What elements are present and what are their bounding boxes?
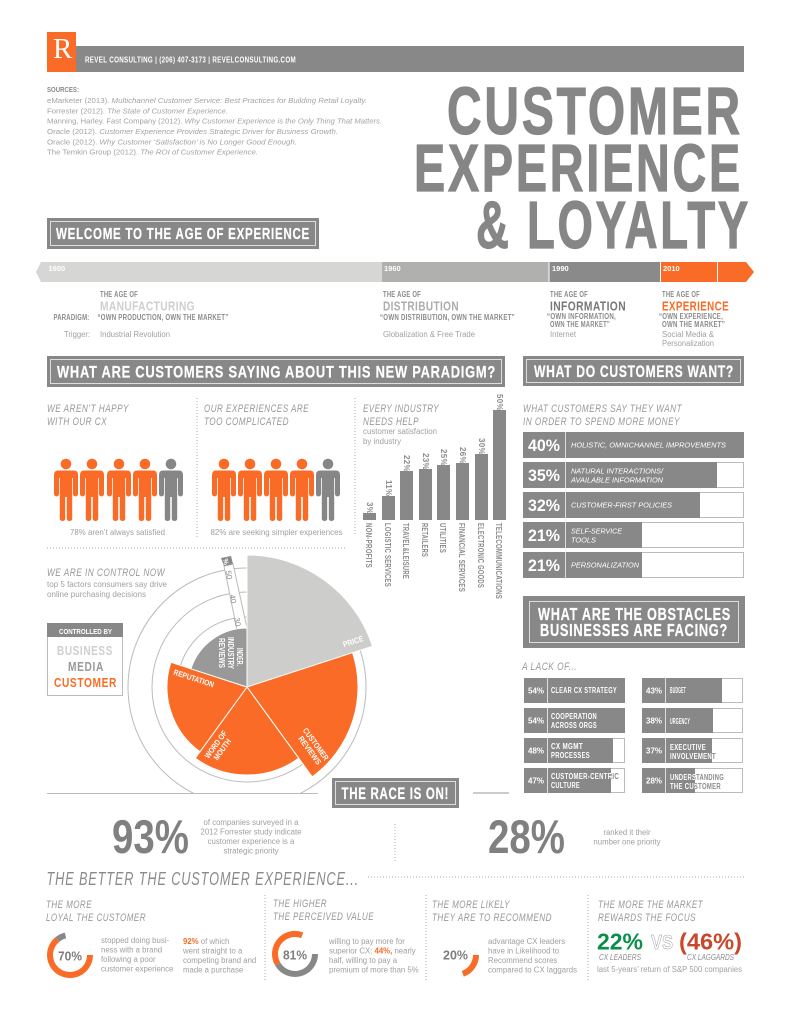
bar: clear cx strategy: CLEAR CX STRATEGY <box>551 686 617 695</box>
slice labels: MOUTH <box>212 737 233 762</box>
scale: 40 <box>228 594 238 605</box>
era: manufacturing: “OWN PRODUCTION, OWN THE MARKET” <box>98 313 228 322</box>
stat: 93%: 2012 Forrester study indicate <box>201 828 301 836</box>
panel: recommend: compared to CX laggards <box>488 966 577 974</box>
heading: welcome <box>47 218 319 249</box>
panel: loyal customer: LOYAL THE CUSTOMER <box>46 912 146 924</box>
bar: cooperation <box>524 708 625 733</box>
panel: loyal customer: made a purchase <box>183 966 243 974</box>
era: distribution: Globalization & Free Trade <box>383 330 475 339</box>
bar: 32% <box>523 492 744 518</box>
scale: 50 <box>224 570 234 581</box>
panel: not happy: WITH OUR CX <box>47 416 107 428</box>
bar: 21% self-service: SELF-SERVICE <box>571 526 623 536</box>
bar: budget <box>642 678 742 703</box>
stat: 93%: strategic priority <box>223 846 279 856</box>
panel: every industry needs help <box>363 394 506 599</box>
stat: 93%: 93% <box>112 810 189 863</box>
timeline: 2010 <box>663 264 680 273</box>
era: distribution: THE AGE OF <box>383 290 421 299</box>
panel: too complicated: 82% are seeking simpler experiences <box>210 528 343 537</box>
bar chart: industries: 50% <box>495 394 504 411</box>
bar chart: industries: UTILITIES <box>438 523 447 553</box>
bar: 40%: 40% <box>528 436 560 455</box>
scale: 30 <box>232 617 243 628</box>
bar: executive involvement: EXECUTIVE <box>670 743 706 752</box>
icon: people 78% <box>54 459 183 521</box>
bar: customer-centric: CUSTOMER-CENTRIC <box>551 772 619 781</box>
panel: what customers want: WHAT CUSTOMERS SAY THEY WANT <box>523 403 683 415</box>
header bar: REVEL CONSULTING | (206) 407-3173 | REVELCONSULTING.COM <box>85 56 296 64</box>
heading: what are customers saying: WHAT ARE CUSTOMERS SAYING ABOUT THIS NEW PARADIGM? <box>57 362 496 382</box>
panel: loyal customer: went straight to a <box>182 946 243 956</box>
bar: 40%: HOLISTIC, OMNICHANNEL IMPROVEMENTS <box>571 440 726 450</box>
donut: 20% <box>443 948 476 974</box>
panel: perceived value: superior CX; 44%, nearly <box>329 946 416 956</box>
panel: we are in control <box>47 567 167 599</box>
logo: R <box>53 33 73 65</box>
heading: what are customers saying <box>47 356 505 387</box>
era: experience: Social Media & <box>662 330 715 339</box>
donut: 81% <box>275 934 315 974</box>
era: information: INFORMATION <box>550 298 626 314</box>
bar chart: industries: 11% <box>384 480 393 496</box>
bar: 21% personalization: 21% <box>528 556 560 575</box>
legend: controlled by: CONTROLLED BY <box>59 627 112 636</box>
era: information: Internet <box>550 330 577 339</box>
era: distribution <box>380 290 515 339</box>
bar: 35% <box>523 462 744 488</box>
panel: loyal customer: stopped doing busi- <box>101 936 169 945</box>
legend: controlled by: MEDIA <box>68 659 104 674</box>
stat: 28%: number one priority <box>593 838 661 846</box>
panel: too complicated <box>204 403 343 537</box>
panel: we are in control: top 5 factors consumers say drive <box>47 580 167 589</box>
era: manufacturing: Trigger: <box>64 330 90 339</box>
era: manufacturing: PARADIGM: <box>54 313 90 322</box>
stat: 93% <box>112 810 301 863</box>
slice labels: REVIEWS <box>217 638 226 669</box>
donut: 20%: 20% <box>443 948 468 962</box>
donut: 81%: 81% <box>283 948 307 962</box>
era: experience: Personalization <box>662 339 714 348</box>
bar: 35%: NATURAL INTERACTIONS/ <box>571 466 664 476</box>
panel: perceived value: THE HIGHER <box>273 898 327 910</box>
bar: 21% self-service <box>523 522 744 548</box>
icon: people 82% <box>212 459 340 521</box>
era: manufacturing <box>54 290 228 339</box>
bar: urgency: 38% <box>646 716 662 726</box>
panel: market rewards: last 5-years’ return of S&P 500 companies <box>597 965 742 974</box>
sources: Oracle (2012). Customer Experience Provides Strategic Driver for Business Growth. <box>47 127 338 136</box>
panel: recommend <box>432 899 577 974</box>
bar: cooperation: COOPERATION <box>551 712 597 721</box>
slice labels: INDUSTRY <box>226 637 235 670</box>
timeline: 1990 <box>552 264 569 273</box>
era: manufacturing: MANUFACTURING <box>100 298 195 314</box>
bar: 21% self-service: 21% <box>528 526 560 545</box>
slice labels: PRICE <box>342 634 365 649</box>
panel: loyal customer: 92% of which <box>183 937 229 946</box>
bar: cooperation: 54% <box>528 716 544 726</box>
header bar <box>76 46 744 72</box>
bar: understanding the customer: THE CUSTOMER <box>670 782 721 791</box>
bar chart: industries: NON-PROFITS <box>364 523 373 568</box>
sources: Manning, Harley. Fast Company (2012). Why Customer Experience is the Only Thing That Matters. <box>47 117 382 126</box>
heading: the race is on: THE RACE IS ON! <box>342 784 449 803</box>
stat: 93%: customer experience is a <box>208 837 295 846</box>
bar chart: industries: 22% <box>402 455 411 472</box>
heading: welcome: WELCOME TO THE AGE OF EXPERIENCE <box>56 226 310 243</box>
era: information: “OWN INFORMATION, <box>547 312 616 321</box>
stat: 93%: of companies surveyed in a <box>204 818 299 827</box>
bar: urgency <box>642 708 742 733</box>
bar: cx mgmt: 48% <box>528 746 544 756</box>
era: experience: OWN THE MARKET” <box>662 320 725 329</box>
slice labels: WORD OF <box>203 729 229 760</box>
bar: customer-centric: CULTURE <box>551 781 580 790</box>
sources: The Temkin Group (2012). The ROI of Customer Experience. <box>47 148 258 157</box>
panel: perceived value: willing to pay more for <box>328 937 405 946</box>
panel: too complicated: TOO COMPLICATED <box>204 416 289 428</box>
legend: controlled by: BUSINESS <box>57 643 113 658</box>
rule <box>47 792 509 794</box>
panel: market rewards: VS <box>651 932 673 954</box>
panel: not happy: WE AREN’T HAPPY <box>47 403 129 415</box>
bar chart: industries: LOGISTIC SERVICES <box>383 523 392 587</box>
bar chart: industries: ELECTRONIC GOODS <box>476 523 485 588</box>
bar chart: industries: 3% <box>365 502 374 514</box>
bar: executive involvement: INVOLVEMENT <box>670 752 716 761</box>
title <box>414 74 751 263</box>
panel: loyal customer: competing brand and <box>183 956 256 965</box>
stat: 28% <box>488 810 661 863</box>
bar chart: industries: TRAVEL&LEISURE <box>401 523 410 579</box>
scale <box>221 556 247 630</box>
bar chart: industries <box>363 394 506 599</box>
sources: eMarketer (2013). Multichannel Customer Service: Best Practices for Building Retail Loyalty. <box>47 96 367 105</box>
panel: market rewards: 22% <box>597 928 643 954</box>
panel: we are in control: online purchasing decisions <box>47 590 146 599</box>
panel: market rewards: (46%) <box>679 928 742 954</box>
bar: understanding the customer: UNDERSTANDING <box>670 773 724 782</box>
bar: 40% <box>523 432 744 458</box>
stat: 28%: 28% <box>488 810 565 863</box>
era: information <box>547 290 626 339</box>
bar: customer-centric <box>524 768 624 793</box>
panel: recommend: THEY ARE TO RECOMMEND <box>432 912 552 924</box>
era: distribution: “OWN DISTRIBUTION, OWN THE MARKET” <box>380 313 515 322</box>
panel: recommend: advantage CX leaders <box>488 937 565 946</box>
slice labels: REVIEWS <box>296 735 323 767</box>
heading: obstacles: BUSINESSES ARE FACING? <box>540 620 728 640</box>
bar: 35%: AVAILABLE INFORMATION <box>570 476 664 484</box>
panel: market rewards: CX LAGGARDS <box>687 953 735 962</box>
timeline: 1960 <box>384 264 401 273</box>
sources <box>47 85 382 157</box>
bar chart: industries: RETAILERS <box>420 523 429 557</box>
panel: what customers want <box>523 403 744 578</box>
heading: the better the customer experience: THE BETTER THE CUSTOMER EXPERIENCE... <box>46 869 359 889</box>
panel: we are in control: WE ARE IN CONTROL NOW <box>47 567 166 579</box>
bar: 21% personalization: PERSONALIZATION <box>571 560 640 570</box>
legend: controlled by: CUSTOMER <box>54 675 117 690</box>
bar chart: industries: 26% <box>458 447 467 464</box>
panel: every industry needs help: NEEDS HELP <box>363 416 419 428</box>
panel: perceived value <box>273 898 419 974</box>
bar: cooperation: ACROSS ORGS <box>551 721 597 730</box>
bar: 21% self-service: TOOLS <box>571 536 596 544</box>
panel: perceived value: THE PERCEIVED VALUE <box>273 911 374 923</box>
chart: polar area factors <box>128 555 372 806</box>
logo <box>47 32 76 72</box>
slice labels: REPUTATION <box>172 668 215 689</box>
bar: cx mgmt: PROCESSES <box>551 751 590 760</box>
panel: perceived value: premium of more than 5% <box>329 966 419 974</box>
panel: every industry needs help: EVERY INDUSTRY <box>363 403 439 415</box>
bar chart: industries: 23% <box>421 453 430 470</box>
era: experience: THE AGE OF <box>662 290 700 299</box>
panel: recommend: Recommend scores <box>488 956 557 965</box>
scale: % <box>221 558 229 566</box>
panel: market rewards: CX LEADERS <box>599 953 642 962</box>
sources: Oracle (2012). Why Customer ‘Satisfaction’ is No Longer Good Enough. <box>47 137 297 146</box>
panel: recommend: have in Likelihood to <box>488 946 560 956</box>
bar chart: industries: TELECOMMUNICATIONS <box>494 523 503 599</box>
bar chart: industries: FINANCIAL SERVICES <box>457 523 466 592</box>
era: distribution: DISTRIBUTION <box>383 298 459 314</box>
panel: obstacles <box>521 661 742 793</box>
era: information: THE AGE OF <box>550 290 588 299</box>
donut: 70%: 70% <box>58 948 82 964</box>
bar: urgency: URGENCY <box>670 717 690 726</box>
legend: controlled by <box>47 623 123 696</box>
timeline <box>36 262 754 282</box>
bar: executive involvement <box>642 738 742 763</box>
slice labels <box>172 634 365 767</box>
bar chart: industries: 30% <box>477 438 486 455</box>
panel: loyal customer: ness with a brand <box>101 946 162 954</box>
era: experience <box>659 290 729 348</box>
sources: SOURCES: <box>47 85 79 94</box>
slice labels: CUSTOMER <box>301 726 331 762</box>
stat: 28%: ranked it their <box>603 828 651 837</box>
panel: loyal customer <box>46 899 256 975</box>
bar chart: industries: 25% <box>439 449 448 466</box>
donut: 70% <box>50 936 90 975</box>
panel: recommend: THE MORE LIKELY <box>432 899 510 911</box>
bar: 32%: CUSTOMER-FIRST POLICIES <box>571 500 672 510</box>
sources: Forrester (2012). The State of Customer Experience. <box>47 106 228 115</box>
panel: market rewards: REWARDS THE FOCUS <box>598 912 696 924</box>
bar: understanding the customer <box>642 768 742 793</box>
era: manufacturing: THE AGE OF <box>100 290 138 299</box>
bar: clear cx strategy: 54% <box>528 686 544 696</box>
bar: 35%: 35% <box>528 466 560 485</box>
bar: clear cx strategy <box>524 678 625 703</box>
panel: not happy: 78% aren’t always satisfied <box>70 528 165 537</box>
bar: budget: 43% <box>646 686 662 696</box>
panel: market rewards <box>597 899 742 974</box>
bar: customer-centric: 47% <box>528 776 544 786</box>
bar: executive involvement: 37% <box>646 746 662 756</box>
era: experience: EXPERIENCE <box>662 298 729 314</box>
panel: loyal customer: following a poor <box>101 955 156 964</box>
era: experience: “OWN EXPERIENCE, <box>659 312 723 321</box>
bar: cx mgmt <box>524 738 624 763</box>
timeline: 1900 <box>48 264 65 273</box>
panel: loyal customer: THE MORE <box>46 899 92 911</box>
era: information: OWN THE MARKET” <box>550 320 610 329</box>
slice labels: INDER. <box>235 648 244 666</box>
bar: 32%: 32% <box>528 496 560 515</box>
panel: perceived value: half, willing to pay a <box>329 956 398 965</box>
panel: what customers want: IN ORDER TO SPEND MORE MONEY <box>523 416 680 428</box>
bar: understanding the customer: 28% <box>646 776 662 786</box>
panel: every industry needs help: customer satisfaction <box>363 427 437 436</box>
heading: what do customers want <box>523 356 744 386</box>
bar: 21% personalization <box>523 552 744 578</box>
heading: the race is on <box>332 778 459 808</box>
panel: market rewards: THE MORE THE MARKET <box>598 899 703 911</box>
bar: cx mgmt: CX MGMT <box>551 742 583 751</box>
panel: obstacles: A LACK OF... <box>521 661 577 673</box>
panel: every industry needs help: by industry <box>363 437 401 446</box>
panel: loyal customer: customer experience <box>101 964 173 974</box>
bar: budget: BUDGET <box>670 686 686 695</box>
heading: obstacles <box>523 596 745 648</box>
era: manufacturing: Industrial Revolution <box>100 330 170 339</box>
panel: too complicated: OUR EXPERIENCES ARE <box>204 403 309 415</box>
panel: not happy <box>47 403 183 537</box>
